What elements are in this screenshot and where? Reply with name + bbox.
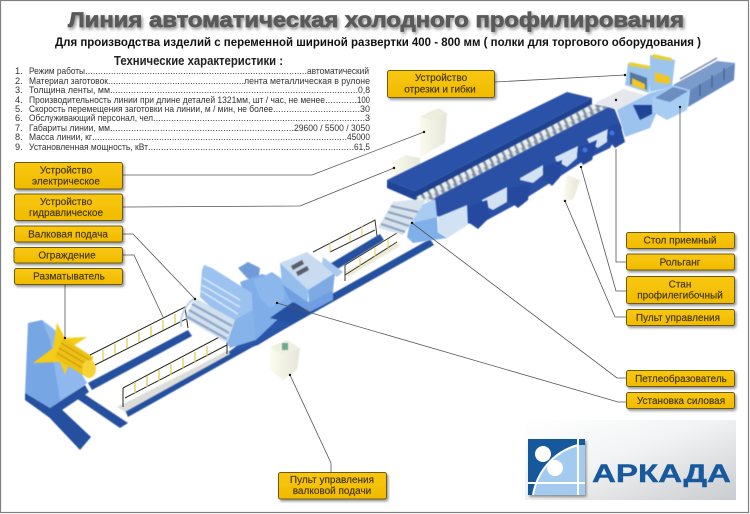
specifications list: 0,8 — [358, 85, 370, 95]
specifications list: 4. — [15, 95, 23, 105]
specifications list: ...................................................................................... — [85, 66, 307, 76]
specifications list: ............ — [325, 95, 357, 105]
specifications list: .................................................................................. — [153, 113, 365, 123]
label: roller feed: Валковая подача — [28, 230, 108, 240]
specifications list: ............................................................................... — [148, 142, 354, 152]
label: control panel — [626, 310, 734, 326]
specifications list: Скорость перемещения заготовки на линии, м / мин, не более — [29, 104, 273, 114]
label: looper — [626, 370, 734, 386]
label: roller feed — [14, 226, 122, 242]
specifications list: Установленная мощность, кВт — [29, 142, 149, 152]
label: hydraulic device: гидравлическое — [29, 208, 103, 219]
specifications list: 100 — [357, 95, 370, 105]
label: roller feed control panel: валковой подачи — [293, 486, 371, 497]
specifications list: Производительность линии при длине деталей 1321мм, шт / час, не менее — [29, 95, 325, 105]
label: receiving table — [626, 232, 734, 248]
title: Линия автоматическая холодного профилирования — [68, 9, 684, 32]
specifications list: 3 — [365, 113, 370, 123]
straightener machine — [280, 252, 343, 312]
label: hydraulic device: Устройство — [40, 197, 93, 208]
specifications list: 7. — [15, 123, 23, 133]
base rails — [88, 234, 434, 417]
uncoiler — [25, 320, 128, 450]
specifications list: Толщина ленты, мм — [29, 85, 110, 95]
label: hydraulic device — [14, 194, 122, 220]
fence: safety guards — [90, 220, 397, 407]
label: guard — [14, 248, 122, 263]
label: cutting and bending device — [388, 70, 494, 98]
logo: Arkada — [525, 420, 736, 500]
specifications list: ................................. — [273, 104, 360, 114]
cabinet: hydraulic unit — [392, 155, 420, 182]
specifications list: 6. — [15, 113, 23, 123]
subtitle: Для производства изделий с переменной шириной развертки 400 - 800 мм ( полки для торгового оборудования ) — [55, 37, 701, 49]
specifications list: 8. — [15, 132, 23, 142]
specifications list: Материал заготовок — [29, 76, 109, 86]
specifications list: ..................................................... — [108, 76, 244, 86]
specifications list: 3. — [15, 85, 23, 95]
specifications list: лента металлическая в рулоне — [244, 76, 370, 86]
specifications list: 30 — [360, 104, 370, 114]
label: roll forming mill: профилегибочный — [637, 290, 723, 302]
specifications list: 1. — [15, 66, 23, 76]
label: looper: Петлеобразователь — [635, 373, 727, 385]
specifications list: 9. — [15, 142, 23, 152]
specifications list: автоматический — [307, 66, 369, 76]
label: electrical device — [14, 162, 122, 189]
label: roll forming mill — [626, 276, 734, 304]
roller feed unit — [181, 262, 313, 352]
label: roll forming mill: Стан — [669, 280, 691, 290]
label: roller conveyor: Рольганг — [660, 258, 701, 268]
label: control panel: Пульт управления — [636, 313, 720, 324]
label: roller feed control panel — [278, 472, 386, 499]
control panel — [563, 175, 580, 200]
control panel of roller feed — [270, 340, 300, 380]
label: receiving table: Стол приемный — [644, 236, 716, 246]
label: roller feed control panel: Пульт управления — [290, 475, 374, 486]
roll forming mill — [387, 92, 625, 238]
label: cutting and bending device: отрезки и гибки — [404, 84, 476, 96]
specifications list: Габариты линии, мм — [29, 123, 110, 133]
label: electrical device: электрическое — [32, 176, 100, 188]
label: uncoiler: Разматыватель — [33, 272, 105, 282]
specifications list — [15, 66, 370, 152]
label: roller conveyor — [626, 254, 734, 270]
specifications list: ............................................................................................... — [110, 85, 358, 95]
logo: Arkada: АРКАДА — [592, 460, 731, 488]
leader lines — [64, 74, 681, 472]
specifications list: 29600 / 5500 / 3050 — [294, 123, 370, 133]
specifications list: 45000 — [347, 132, 370, 142]
label: electrical device: Устройство — [40, 166, 93, 176]
cabinet: electrical unit — [420, 108, 447, 157]
specifications list: Масса линии, кг — [29, 132, 93, 142]
receiving table — [652, 58, 735, 120]
specifications list: 5. — [15, 104, 23, 114]
heading: technical specifications: Технические характеристики : — [114, 54, 283, 68]
label: uncoiler — [14, 268, 122, 284]
label: guard: Ограждение — [38, 250, 96, 262]
label: power unit: Установка силовая — [637, 396, 725, 407]
label: cutting and bending device: Устройство — [415, 73, 468, 84]
label: power unit — [626, 392, 734, 408]
specifications list: Обслуживающий персонал, чел — [29, 113, 153, 123]
specifications list: ...................................................................... — [110, 123, 294, 133]
specifications list: Режим работы — [29, 66, 85, 76]
specifications list: ................................................................................................... — [92, 132, 347, 142]
specifications list: 2. — [15, 76, 23, 86]
specifications list: 61,5 — [354, 142, 370, 152]
looper — [378, 198, 447, 243]
table and cutting device — [595, 54, 675, 137]
